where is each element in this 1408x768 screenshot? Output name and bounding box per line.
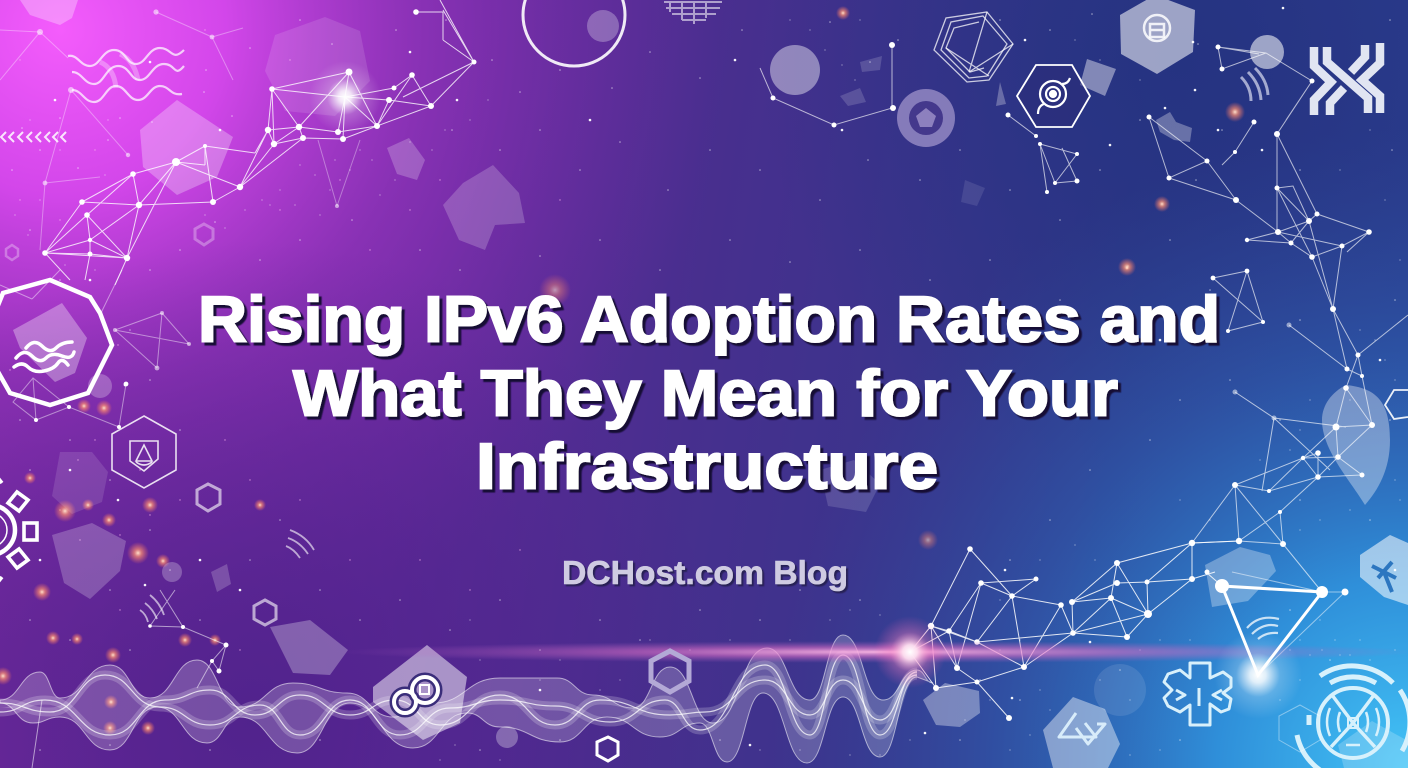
icon: wireframe hexagon	[934, 12, 1013, 82]
icon: lower-right triangle	[1215, 579, 1348, 675]
icon: gear	[0, 478, 37, 582]
icon: hex outline lower right	[1279, 705, 1320, 752]
title: What They Mean for Your	[293, 356, 1118, 430]
subtitle: DCHost.com Blog	[562, 554, 848, 591]
icon: hexagon emblem top right	[1144, 15, 1170, 41]
network: left constellation	[0, 270, 189, 427]
network: top centre and right	[760, 45, 1408, 592]
icon: circuit pattern top	[664, 2, 722, 24]
icon: wave lines top left	[68, 48, 184, 102]
network nodes: right	[770, 42, 1375, 721]
icon: linked rings in hexagon	[394, 677, 438, 713]
flare: upper-left	[309, 61, 381, 133]
icon: small ring bottom	[597, 737, 618, 761]
icon: wifi arcs	[1247, 618, 1279, 639]
title	[198, 282, 1220, 502]
logo mark	[1314, 43, 1380, 115]
network: upper-left constellation	[0, 0, 474, 285]
flare: lower right	[1214, 631, 1302, 719]
wave band	[0, 635, 933, 763]
icon: circle outline top	[523, 0, 625, 66]
icon: octagon with waves	[0, 280, 112, 405]
icon: signal arcs top right	[1241, 68, 1268, 101]
icon: chevrons	[1, 132, 66, 142]
flare and streak: lower centre	[340, 616, 1408, 688]
network nodes: upper-left and left	[34, 9, 476, 673]
icon: compass emblem right	[1372, 562, 1396, 592]
icon: hexagon badge	[112, 416, 176, 488]
icon: dark hexagon target	[1017, 65, 1090, 127]
icon: small arcs	[140, 530, 314, 622]
icon: small rings	[6, 224, 276, 625]
icon: ring with pentagon	[897, 89, 955, 147]
title: Infrastructure	[476, 430, 938, 502]
network: lower-right constellation	[910, 541, 1345, 718]
icon: medical cross network	[1164, 663, 1231, 725]
icon: ring hexagon centre	[651, 651, 689, 692]
icon: hexagon outline right	[1385, 390, 1408, 419]
icon: triangle hexagon	[1059, 713, 1105, 744]
title: Rising IPv6 Adoption Rates and	[198, 282, 1220, 356]
network: lower-left constellation	[32, 590, 226, 768]
icon: radar emblem	[1297, 666, 1408, 768]
